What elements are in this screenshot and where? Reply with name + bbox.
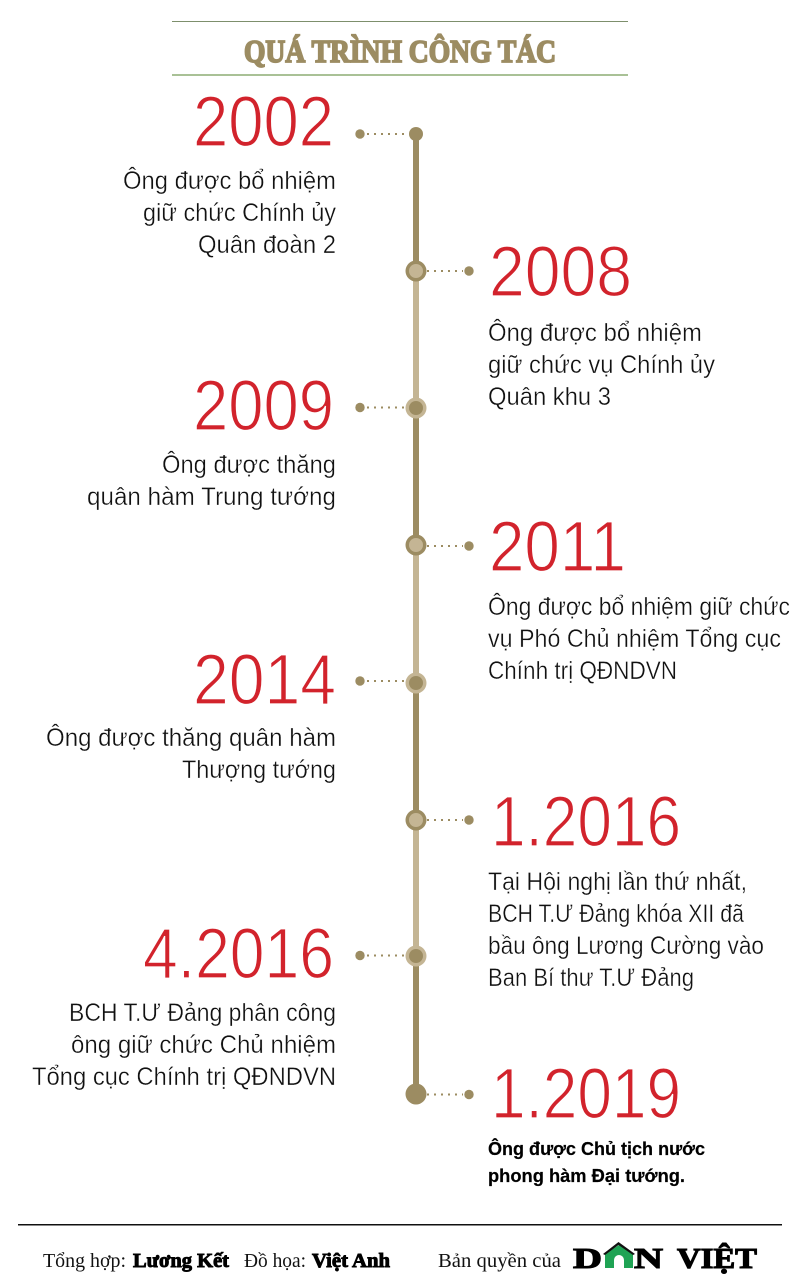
entry 2011: vụ Phó Chủ nhiệm Tổng cục [488,625,781,653]
footer credits: Đồ họa: [244,1250,306,1272]
entry 2008: Quân khu 3 [488,383,611,411]
entry 2011: Chính trị QĐNDVN [488,657,677,685]
entry 2014 [46,641,336,784]
entry 2011: 2011 [489,508,626,587]
entry 4.2016: ông giữ chức Chủ nhiệm [71,1031,336,1059]
entry 1.2016: BCH T.Ư Đảng khóa XII đã [488,900,744,928]
entry 2008 [488,233,715,411]
entry 4.2016: BCH T.Ư Đảng phân công [69,999,336,1027]
entry 2009 [87,367,336,511]
entry 4.2016: Tổng cục Chính trị QĐNDVN [32,1063,336,1091]
footer credits: Lương Kết [133,1250,229,1272]
entry 1.2019 [488,1055,705,1186]
entry 1.2016: 1.2016 [491,783,681,862]
logo: Dan Viet: D [573,1243,602,1275]
entry 2002 [123,83,336,259]
entry 4.2016: 4.2016 [143,915,334,994]
logo: Dan Viet: VIỆT [677,1242,757,1275]
title: QUÁ TRÌNH CÔNG TÁC [244,33,556,69]
entry 2008: giữ chức vụ Chính ủy [488,351,715,379]
footer credits: Việt Anh [312,1250,390,1272]
entry 2014: 2014 [193,641,336,720]
entry 1.2019: phong hàm Đại tướng. [488,1165,685,1186]
entry 1.2016: Tại Hội nghị lần thứ nhất, [488,868,747,896]
entry 2002: Quân đoàn 2 [198,231,336,259]
entry 1.2016: Ban Bí thư T.Ư Đảng [488,964,694,992]
logo: Dan Viet [573,1242,757,1275]
node 2002 [355,127,423,141]
node 2011 [406,534,474,556]
entry 1.2016 [488,783,764,992]
entry 2002: Ông được bổ nhiệm [123,166,336,195]
node 1.2016 [406,810,474,830]
entry 2002: giữ chức Chính ủy [143,199,336,227]
footer credits: Tổng hợp: [43,1250,126,1272]
entry 2011 [488,508,790,685]
entry 1.2019: Ông được Chủ tịch nước [488,1138,705,1159]
timeline axis [413,134,419,1094]
entry 2009: Ông được thăng [162,450,336,479]
entry 2008: 2008 [489,233,632,312]
entry 2009: 2009 [193,367,334,446]
node 4.2016 [355,946,426,966]
footer credits: Bản quyền của [438,1250,561,1272]
node 1.2019 [406,1084,474,1104]
entry 2009: quân hàm Trung tướng [87,483,336,511]
logo: Dan Viet: N [634,1243,663,1275]
node 2009 [355,398,426,418]
entry 2014: Thượng tướng [182,756,336,784]
entry 4.2016 [32,915,336,1091]
node 2014 [355,672,426,694]
entry 2014: Ông được thăng quân hàm [46,723,336,752]
entry 2002: 2002 [193,83,334,162]
footer credits [18,1224,782,1272]
entry 1.2016: bầu ông Lương Cường vào [488,932,764,960]
node 2008 [406,260,474,282]
entry 1.2019: 1.2019 [491,1055,681,1134]
entry 2008: Ông được bổ nhiệm [488,318,702,347]
